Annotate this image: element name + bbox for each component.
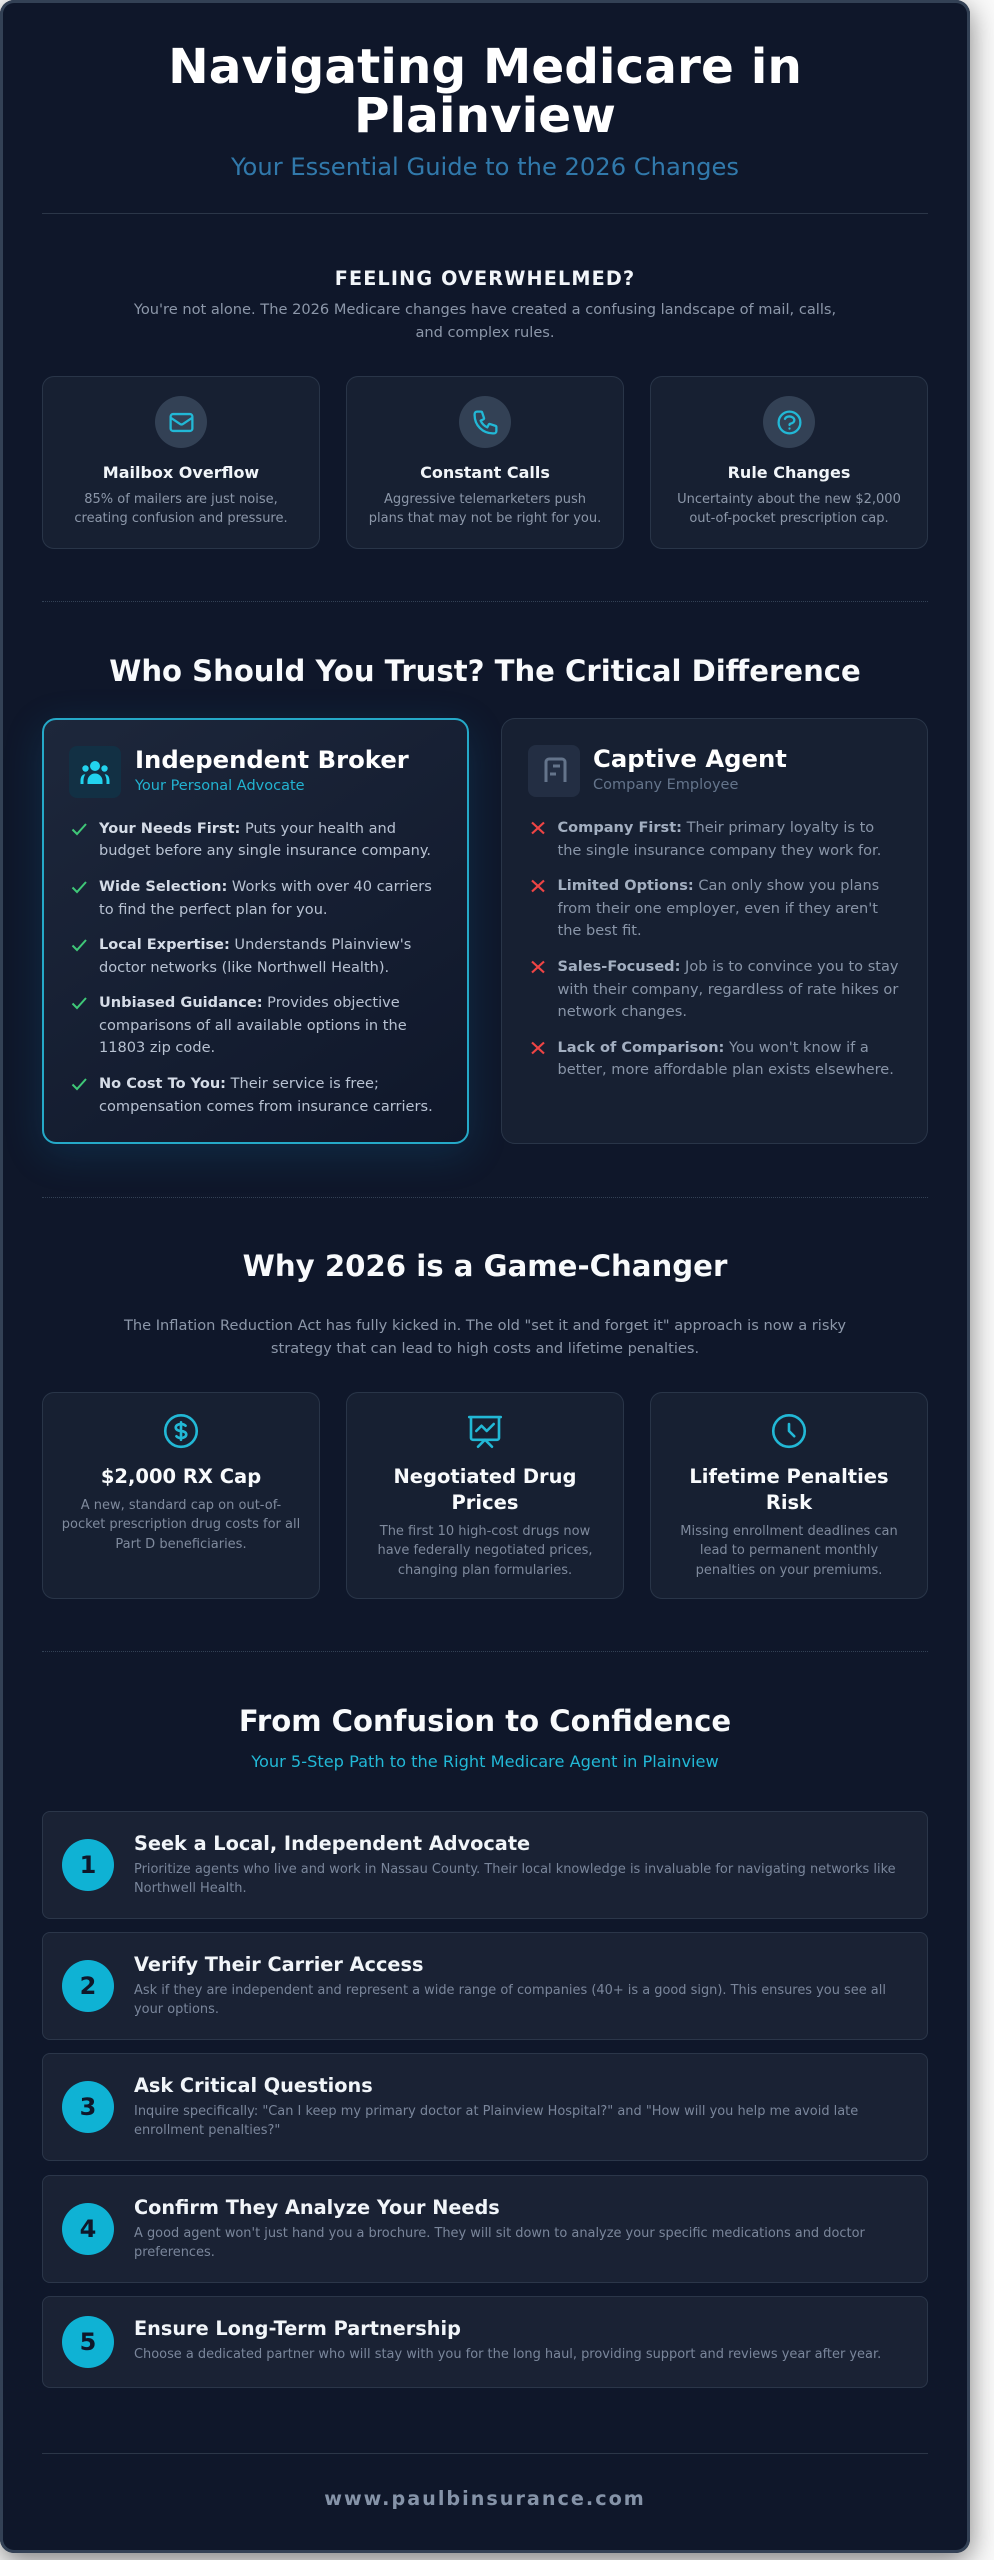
step text: Northwell Health. [134, 1881, 247, 1896]
card text: penalties on your premiums. [696, 1563, 882, 1578]
title: Plainview [354, 88, 616, 144]
agent drawbacks list: from their one employer, even if they aren't [558, 900, 878, 917]
card text: pocket prescription drug costs for all [62, 1517, 300, 1532]
card text [677, 492, 901, 526]
icon: building [528, 745, 580, 797]
step text [134, 1862, 896, 1896]
card heading: $2,000 RX Cap [101, 1465, 261, 1488]
card heading: Risk [766, 1491, 812, 1514]
step heading: Ensure Long-Term Partnership [134, 2317, 461, 2340]
step number [62, 2203, 114, 2255]
agent heading: Captive Agent [593, 744, 787, 773]
card text [74, 492, 288, 526]
step number [62, 2316, 114, 2368]
section heading: confidence: From Confusion to Confidence [239, 1704, 731, 1738]
step 3 [42, 2053, 928, 2161]
step number [62, 2081, 114, 2133]
section heading: trust: Who Should You Trust? The Critical Difference [109, 654, 861, 688]
icon: question mark [763, 396, 815, 448]
card text: The first 10 high-cost drugs now [380, 1524, 590, 1539]
card text [369, 492, 601, 526]
step text: preferences. [134, 2245, 215, 2260]
step number: 1 [80, 1851, 96, 1879]
intro paragraph: You're not alone. The 2026 Medicare changes have created a confusing landscape of mail, calls, [134, 300, 836, 318]
card text: creating confusion and pressure. [74, 511, 288, 526]
step heading: Ask Critical Questions [134, 2074, 373, 2097]
panel: lifetime penalties [650, 1392, 928, 1599]
section paragraph: The Inflation Reduction Act has fully kicked in. The old "set it and forget it" approach is now a risky [124, 1316, 846, 1334]
panel: negotiated prices [346, 1392, 624, 1599]
step text: Inquire specifically: "Can I keep my primary doctor at Plainview Hospital?" and "How will you help me avoid late [134, 2104, 858, 2119]
step text: Ask if they are independent and represent a wide range of companies (40+ is a good sign). This ensures you see all [134, 1983, 886, 1998]
card text: Missing enrollment deadlines can [680, 1524, 898, 1539]
card heading: Prices [452, 1491, 518, 1514]
panel: rx cap [42, 1392, 320, 1599]
card text: lead to permanent monthly [700, 1543, 878, 1558]
agent drawbacks list: the best fit. [558, 922, 642, 939]
broker benefits list: compensation comes from insurance carriers. [99, 1098, 433, 1115]
panel: captive agent [501, 718, 928, 1144]
agent subtitle: Company Employee [593, 777, 738, 793]
broker benefits list: budget before any single insurance company. [99, 842, 431, 859]
step number: 2 [80, 1972, 96, 2000]
section paragraph [124, 1316, 846, 1356]
step 1 [42, 1811, 928, 1919]
icon: people [69, 746, 121, 798]
step 2 [42, 1932, 928, 2040]
card text: changing plan formularies. [398, 1563, 572, 1578]
card heading: Rule Changes [728, 462, 850, 482]
step text [134, 1983, 886, 2017]
card text: Part D beneficiaries. [115, 1537, 247, 1552]
step text: A good agent won't just hand you a brochure. They will sit down to analyze your specific medications and doctor [134, 2226, 865, 2241]
broker benefits list: No Cost To You: Their service is free; [99, 1075, 379, 1092]
section paragraph: strategy that can lead to high costs and lifetime penalties. [271, 1340, 699, 1356]
card text: have federally negotiated prices, [377, 1543, 593, 1558]
card text: plans that may not be right for you. [369, 511, 601, 526]
step number: 5 [80, 2328, 96, 2356]
broker benefits list: Wide Selection: Works with over 40 carriers [99, 878, 432, 895]
agent drawbacks list: Sales-Focused: Job is to convince you to stay [558, 958, 899, 975]
title: Navigating Medicare in [168, 39, 802, 95]
card text: Aggressive telemarketers push [384, 492, 586, 507]
step text [134, 2104, 858, 2138]
broker subtitle: Your Personal Advocate [135, 778, 305, 794]
section heading: feeling overwhelmed: FEELING OVERWHELMED? [335, 267, 635, 290]
agent drawbacks list: the single insurance company they work for. [558, 842, 881, 859]
broker heading: Independent Broker [135, 745, 409, 774]
card text: Uncertainty about the new $2,000 [677, 492, 901, 507]
broker benefits list: Local Expertise: Understands Plainview's [99, 936, 411, 953]
card text [680, 1524, 898, 1578]
agent drawbacks list: with their company, regardless of rate hikes or [558, 981, 898, 998]
broker benefits list: comparisons of all available options in the [99, 1017, 407, 1034]
agent drawbacks list: Company First: Their primary loyalty is to [558, 819, 874, 836]
card heading: Negotiated Drug [393, 1465, 576, 1488]
card heading [393, 1465, 576, 1514]
intro paragraph: and complex rules. [415, 324, 555, 340]
broker benefits list: 11803 zip code. [99, 1039, 215, 1056]
title [168, 39, 802, 144]
agent drawbacks list: Lack of Comparison: You won't know if a [558, 1039, 869, 1056]
icon: mail [155, 396, 207, 448]
agent drawbacks list: Limited Options: Can only show you plans [558, 877, 879, 894]
panel: independent broker [42, 718, 469, 1144]
card text: 85% of mailers are just noise, [84, 492, 278, 507]
step heading: Confirm They Analyze Your Needs [134, 2196, 500, 2219]
step number [62, 1960, 114, 2012]
panel: rule changes [650, 376, 928, 549]
agent drawbacks list: better, more affordable plan exists elsewhere. [558, 1061, 894, 1078]
step text: Prioritize agents who live and work in Nassau County. Their local knowledge is invaluable for navigating networks like [134, 1862, 896, 1877]
step 4 [42, 2175, 928, 2283]
icon: presentation chart [468, 1416, 502, 1448]
step heading: Verify Their Carrier Access [134, 1953, 423, 1976]
section subtitle: Your 5-Step Path to the Right Medicare Agent in Plainview [251, 1752, 719, 1771]
step heading: Seek a Local, Independent Advocate [134, 1832, 530, 1855]
panel: constant calls [346, 376, 624, 549]
intro paragraph [134, 300, 836, 340]
broker benefits list: Unbiased Guidance: Provides objective [99, 994, 400, 1011]
step text [134, 2226, 865, 2260]
step text: Choose a dedicated partner who will stay with you for the long haul, providing support and reviews year after year. [134, 2347, 881, 2362]
card text: out-of-pocket prescription cap. [689, 511, 889, 526]
broker benefits list: Your Needs First: Puts your health and [99, 820, 396, 837]
card heading [689, 1465, 889, 1514]
broker benefits list: doctor networks (like Northwell Health). [99, 959, 389, 976]
icon: phone [459, 396, 511, 448]
icon: clock [772, 1414, 806, 1448]
step text: enrollment penalties?" [134, 2123, 280, 2138]
broker benefits list [72, 820, 433, 1115]
panel: mailbox overflow [42, 376, 320, 549]
card text: A new, standard cap on out-of- [81, 1498, 281, 1513]
card heading: Lifetime Penalties [689, 1465, 889, 1488]
step 5 [42, 2296, 928, 2388]
step number: 3 [80, 2093, 96, 2121]
card heading: Constant Calls [420, 462, 550, 482]
agent drawbacks list: network changes. [558, 1003, 687, 1020]
step number: 4 [80, 2215, 96, 2243]
section heading: game changer: Why 2026 is a Game-Changer [243, 1249, 727, 1283]
card heading: Mailbox Overflow [103, 462, 259, 482]
subtitle: Your Essential Guide to the 2026 Changes [231, 153, 739, 181]
card text [62, 1498, 300, 1552]
card text [377, 1524, 593, 1578]
broker benefits list: to find the perfect plan for you. [99, 900, 328, 918]
icon: dollar [164, 1414, 198, 1448]
agent drawbacks list [531, 819, 899, 1078]
footer website: www.paulbinsurance.com [324, 2487, 646, 2510]
step text: your options. [134, 2002, 219, 2017]
step number [62, 1839, 114, 1891]
